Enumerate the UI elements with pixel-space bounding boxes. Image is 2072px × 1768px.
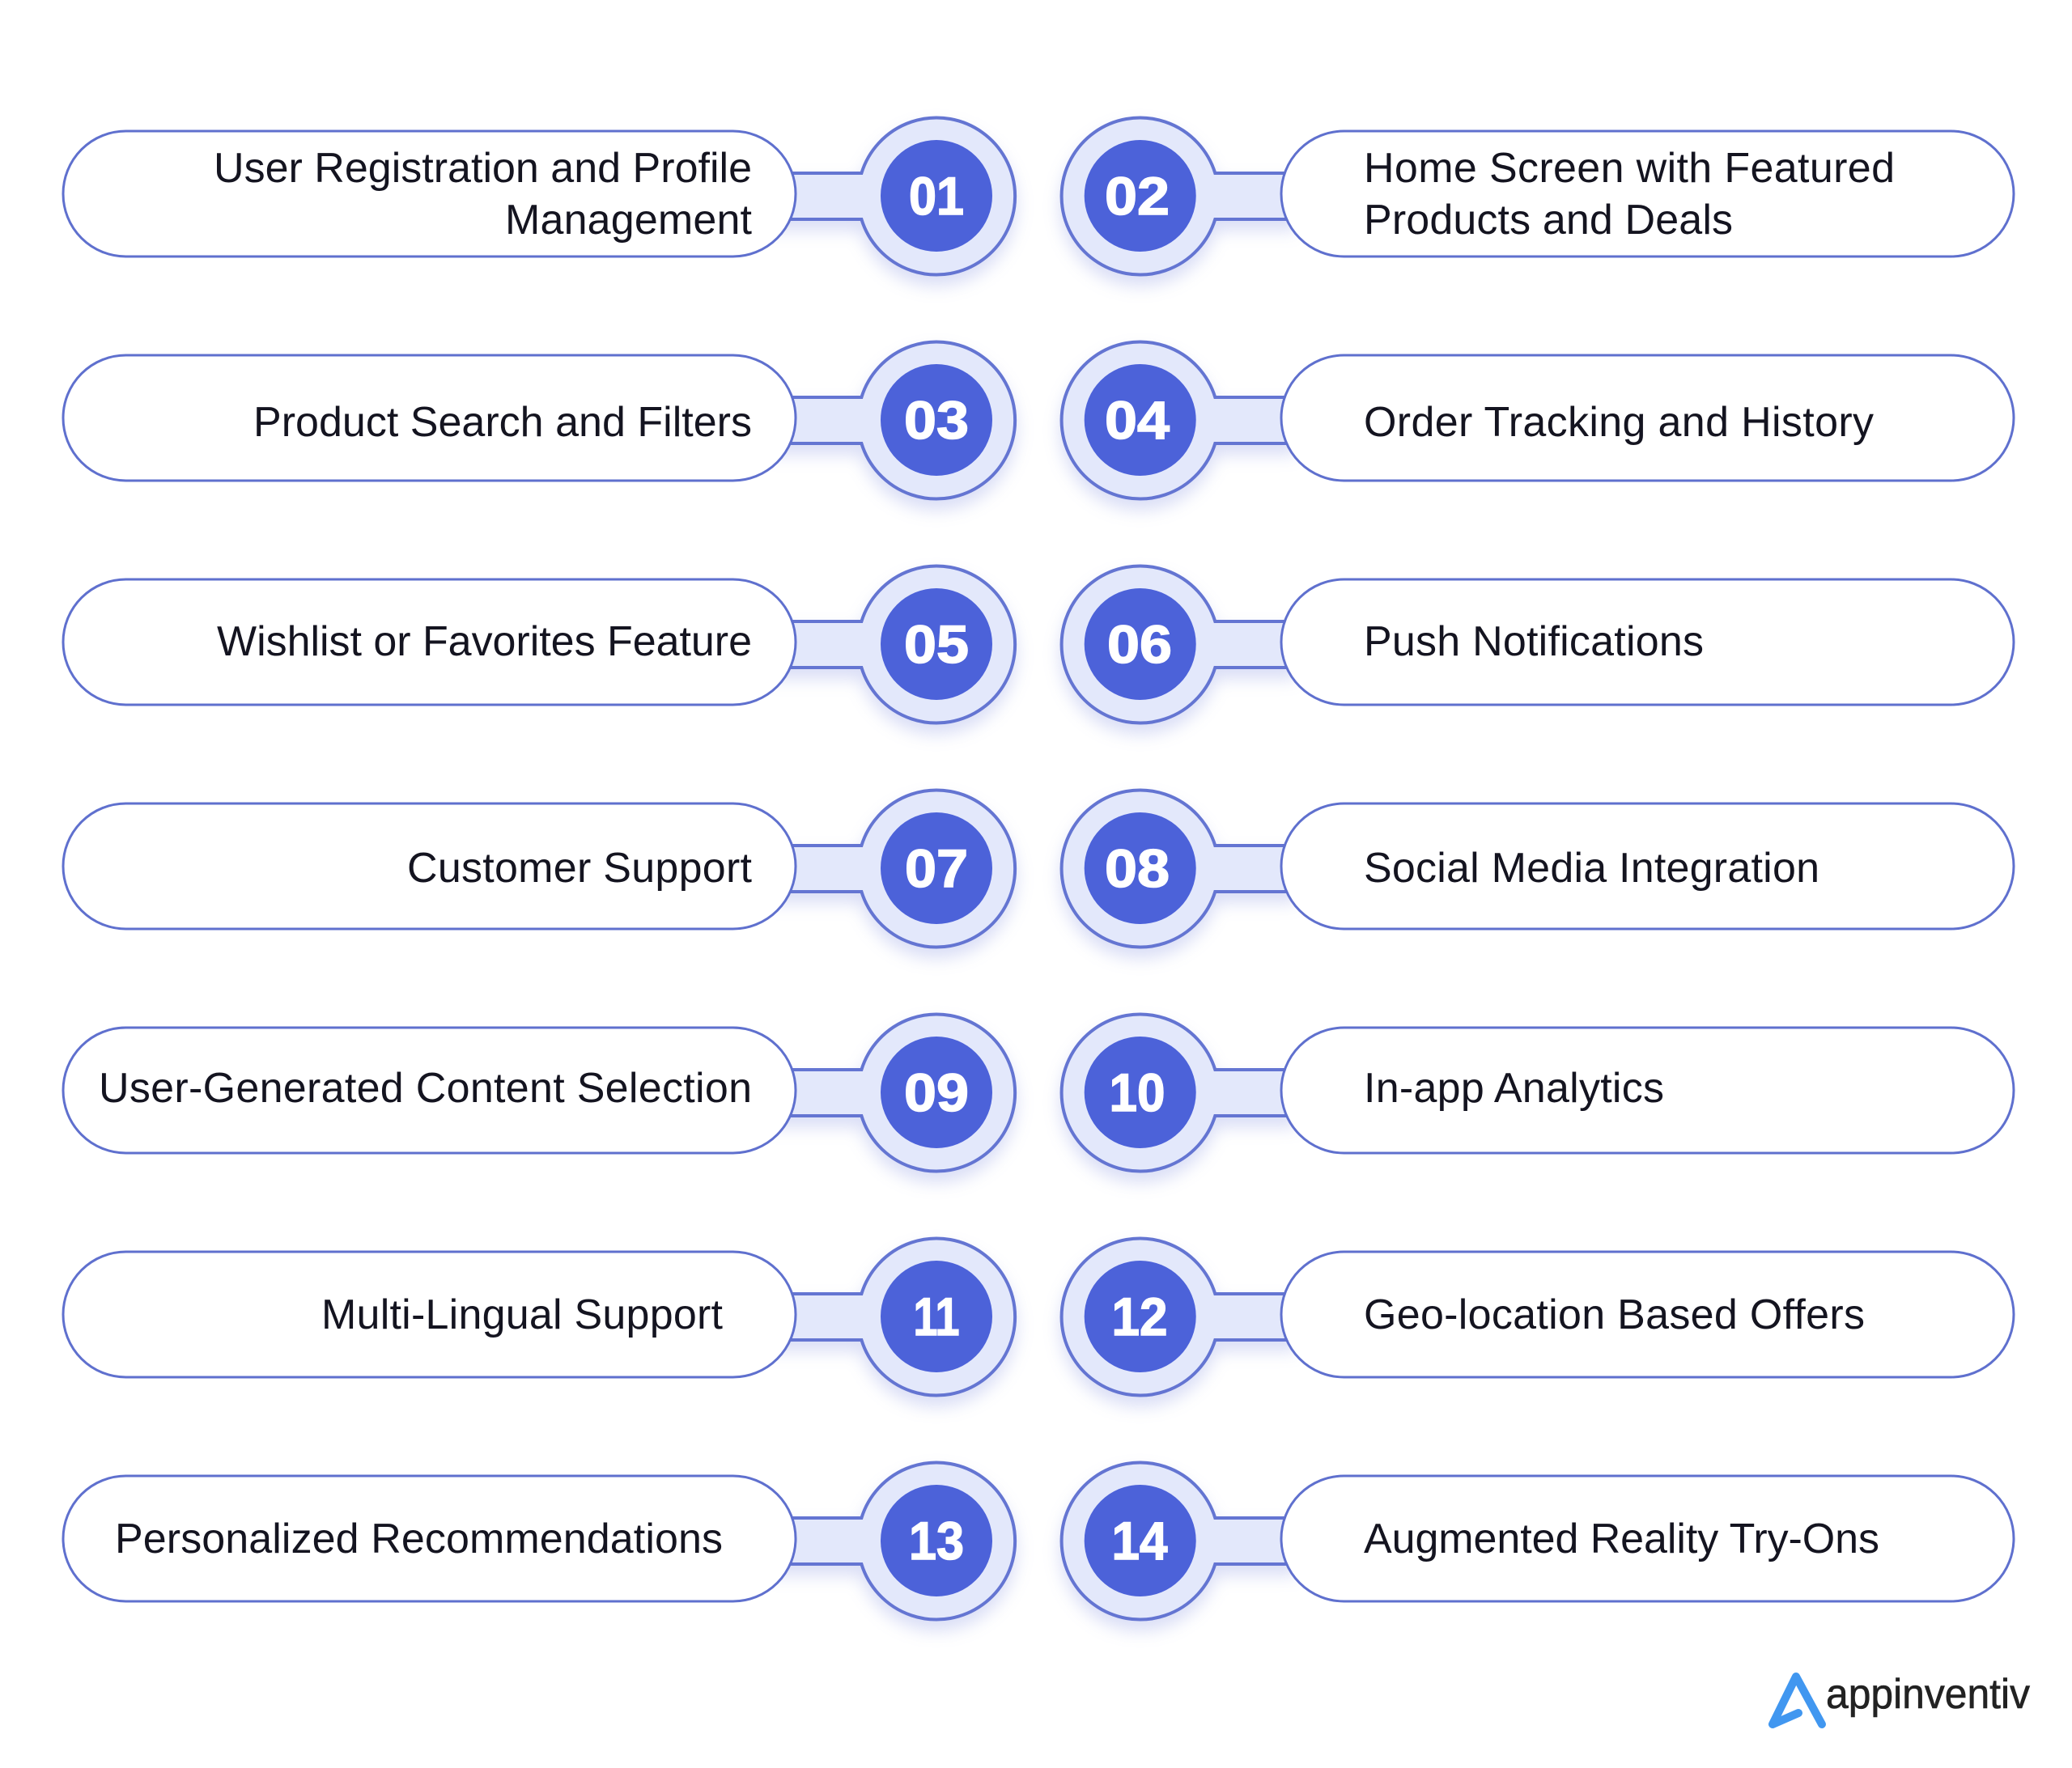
item 12: 12 bbox=[1112, 1287, 1167, 1346]
item 03: 03 bbox=[904, 390, 969, 450]
item 09: 09 bbox=[904, 1062, 969, 1122]
logo: appinventiv bbox=[1773, 1671, 2030, 1724]
item 13: 13 bbox=[909, 1511, 964, 1571]
logo wordmark: appinventiv bbox=[1826, 1671, 2030, 1718]
item 10 bbox=[1062, 1015, 2014, 1172]
item 02: Products and Deals bbox=[1364, 197, 1733, 244]
item 08: Social Media Integration bbox=[1364, 845, 1819, 892]
item 12: Geo-location Based Offers bbox=[1364, 1291, 1865, 1338]
item 02: 02 bbox=[1105, 166, 1170, 226]
item 07: Customer Support bbox=[407, 845, 753, 892]
item 05: Wishlist or Favorites Feature bbox=[217, 618, 752, 665]
item 01 bbox=[63, 118, 1015, 275]
item 05: 05 bbox=[904, 614, 969, 674]
item 01: User Registration and Profile bbox=[214, 145, 752, 192]
item 10: 10 bbox=[1109, 1062, 1166, 1122]
item 04: 04 bbox=[1105, 390, 1170, 450]
item 09: User-Generated Content Selection bbox=[99, 1065, 752, 1112]
item 01: 01 bbox=[909, 166, 964, 226]
item 11: Multi-Lingual Support bbox=[321, 1291, 724, 1338]
item 03 bbox=[63, 341, 1015, 498]
item 11: 11 bbox=[913, 1287, 960, 1346]
item 01: Management bbox=[505, 197, 753, 244]
item 08 bbox=[1062, 790, 2014, 947]
item 13 bbox=[63, 1462, 1015, 1620]
item 02: Home Screen with Featured bbox=[1364, 145, 1895, 192]
item 06: 06 bbox=[1107, 614, 1172, 674]
item 02 bbox=[1062, 118, 2014, 275]
item 06 bbox=[1062, 566, 2014, 723]
item 05 bbox=[63, 566, 1015, 723]
icon: logo mark bbox=[1773, 1677, 1822, 1724]
item 14 bbox=[1062, 1462, 2014, 1620]
item 14: 14 bbox=[1112, 1511, 1168, 1571]
item 11 bbox=[63, 1238, 1015, 1395]
item 07: 07 bbox=[905, 838, 968, 898]
item 08: 08 bbox=[1105, 838, 1170, 898]
item 06: Push Notifications bbox=[1364, 618, 1704, 665]
item 14: Augmented Reality Try-Ons bbox=[1364, 1516, 1879, 1562]
item 07 bbox=[63, 790, 1015, 947]
item 09 bbox=[63, 1014, 1015, 1172]
item 12 bbox=[1062, 1238, 2014, 1395]
item 03: Product Search and Filters bbox=[253, 399, 752, 446]
item 13: Personalized Recommendations bbox=[115, 1516, 723, 1562]
item 04 bbox=[1062, 342, 2014, 498]
item 10: In-app Analytics bbox=[1364, 1065, 1664, 1112]
item 04: Order Tracking and History bbox=[1364, 399, 1874, 446]
